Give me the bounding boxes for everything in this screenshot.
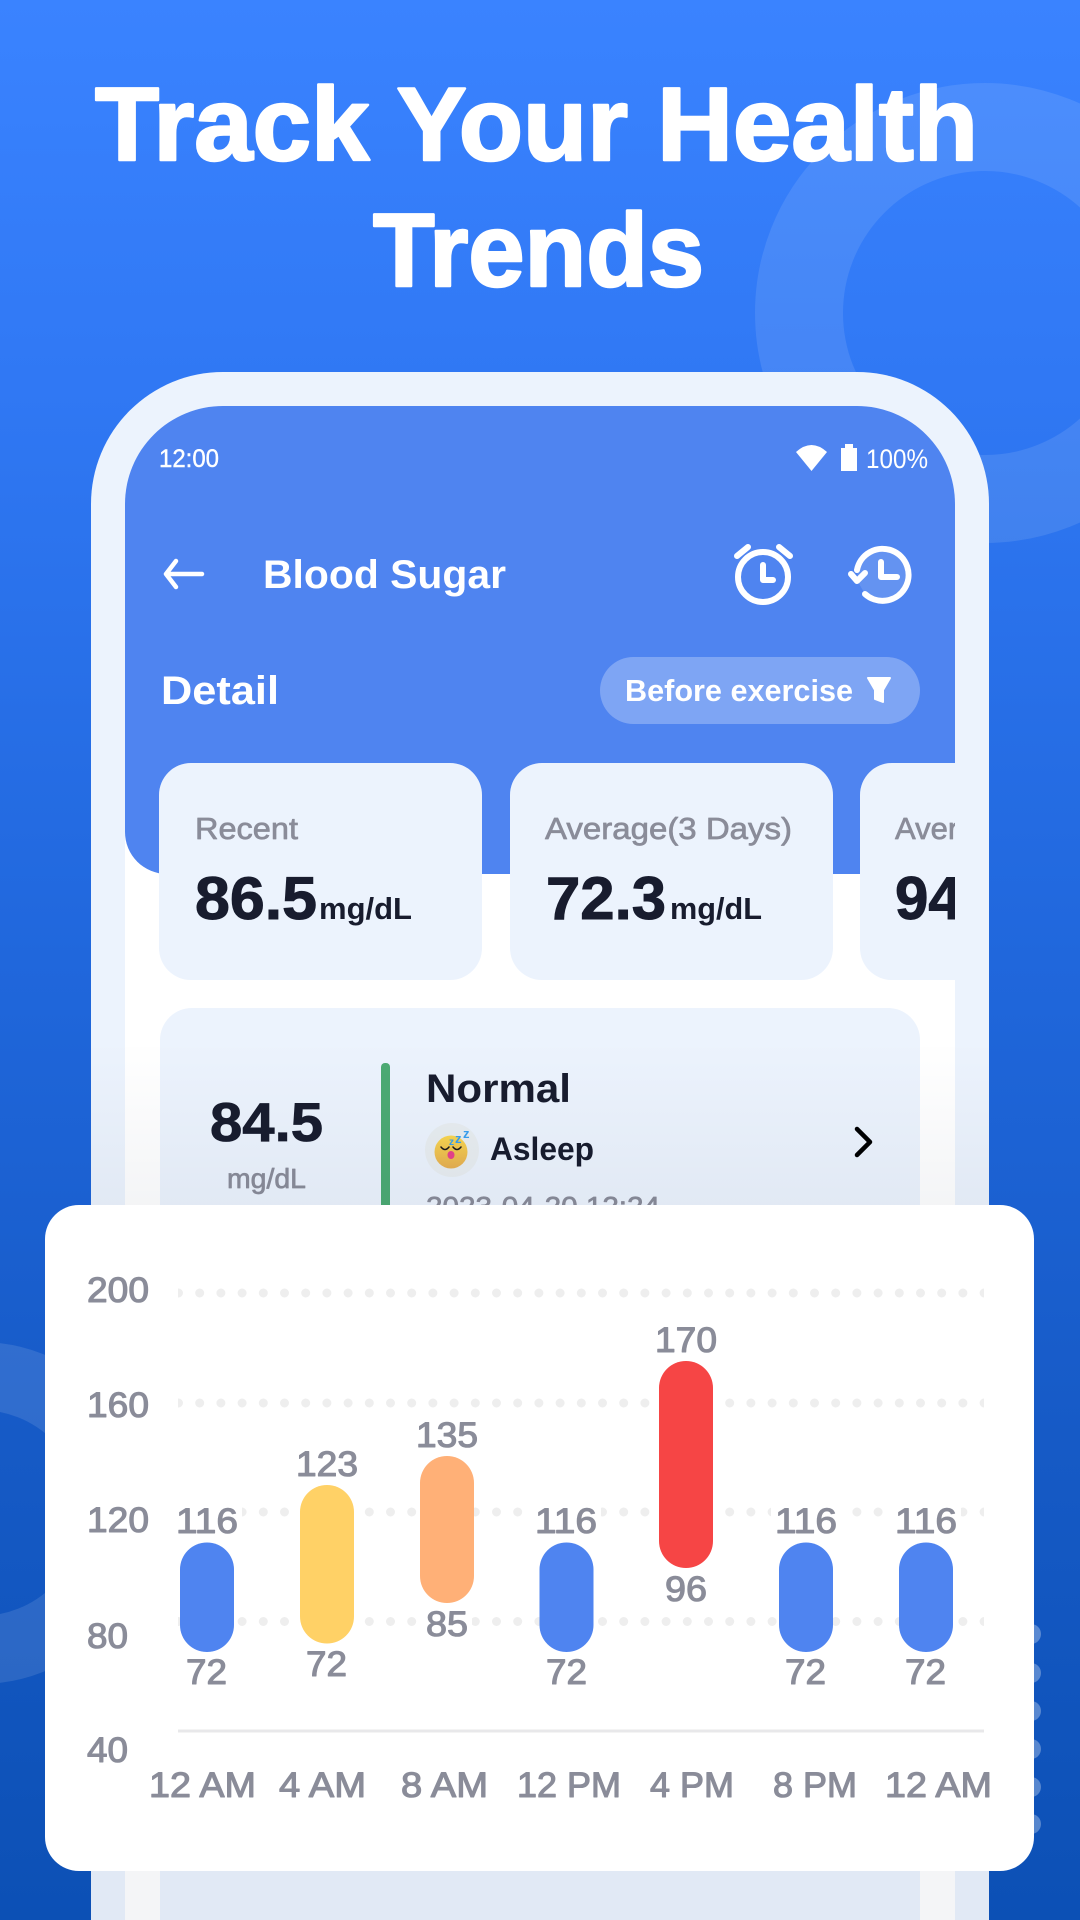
icon: funnel — [868, 678, 890, 702]
bar: 8 AM — [416, 1416, 478, 1644]
y axis labels: 40 — [87, 1731, 128, 1770]
card: average 3 days — [510, 763, 833, 980]
bar: 12 PM: 72 — [546, 1653, 587, 1692]
icon: sleeping emoji: z — [449, 1137, 454, 1148]
icon: sleeping emoji — [425, 1123, 479, 1177]
bar: 8 PM: 72 — [785, 1653, 826, 1692]
record date: 2023-04-20 12:24 — [426, 1191, 660, 1222]
y axis labels — [87, 1271, 149, 1770]
card: recent — [159, 763, 482, 980]
record card — [160, 1008, 920, 1920]
icon: sleeping emoji: z — [463, 1126, 470, 1141]
header panel — [125, 406, 955, 874]
card: average 3 days: 72.3 — [546, 865, 666, 932]
chart baseline — [178, 1730, 984, 1732]
record status: Normal — [426, 1067, 571, 1111]
phone mockup — [91, 372, 1080, 1920]
x axis labels — [149, 1766, 992, 1805]
x axis labels: 12 AM — [149, 1766, 256, 1805]
grid lines — [178, 1293, 990, 1622]
card: average 3 days: mg/dL — [670, 891, 762, 926]
decorative dots: right column — [1021, 1624, 1041, 1834]
phone screen — [125, 406, 955, 1920]
icon: back arrow — [166, 561, 202, 587]
y axis labels: 160 — [87, 1386, 149, 1425]
bar: 12 AM end: 72 — [905, 1653, 946, 1692]
card: average clipped: 94 — [895, 865, 962, 932]
bar: 12 AM: 72 — [186, 1653, 227, 1692]
record mood: Asleep — [490, 1131, 594, 1167]
status bar time: 12:00 — [159, 445, 219, 473]
y axis labels: 200 — [87, 1271, 149, 1310]
decorative ring: left — [0, 1376, 117, 1650]
decorative ring: top right — [799, 127, 1080, 499]
x axis labels: 4 PM — [650, 1766, 734, 1805]
bar: 4 AM: 123 — [296, 1445, 358, 1484]
title: Trends — [373, 193, 704, 309]
title — [95, 67, 978, 309]
icon: battery — [841, 444, 857, 471]
phone frame — [91, 372, 989, 1920]
card: average 3 days: Average(3 Days) — [545, 811, 792, 846]
card: recent: Recent — [195, 811, 298, 846]
y axis labels: 80 — [87, 1617, 128, 1656]
icon: alarm clock — [737, 547, 790, 602]
bar: 12 PM — [535, 1502, 597, 1692]
title: Track Your Health — [95, 67, 978, 183]
card: average clipped — [860, 763, 955, 980]
icon: history clock — [851, 549, 909, 601]
bar: 8 AM: 135 — [416, 1416, 478, 1455]
bar: 12 AM — [176, 1502, 238, 1692]
x axis labels: 12 PM — [517, 1766, 621, 1805]
x axis labels: 4 AM — [279, 1766, 366, 1805]
y axis labels: 120 — [87, 1501, 149, 1540]
bar: 8 AM: 85 — [426, 1605, 468, 1644]
record value: 84.5 — [210, 1091, 323, 1153]
battery percent: 100% — [866, 444, 928, 474]
chart panel — [45, 1205, 1034, 1871]
record unit: mg/dL — [227, 1163, 306, 1194]
bar: 12 PM: 116 — [535, 1502, 597, 1541]
card: average clipped: Average — [895, 811, 1010, 846]
filter pill: Before exercise — [625, 673, 853, 708]
bar: 12 AM end — [895, 1502, 957, 1692]
phone lower fade — [91, 1040, 989, 1205]
section heading: Detail — [161, 669, 279, 713]
bar: 4 PM: 170 — [655, 1321, 717, 1360]
bar: 4 PM: 96 — [665, 1570, 707, 1609]
screen title: Blood Sugar — [263, 553, 506, 597]
icon: sleeping emoji: z — [455, 1131, 462, 1146]
icon: chevron — [857, 1129, 870, 1155]
icon: wifi — [796, 445, 827, 471]
screen background — [125, 836, 955, 1920]
bar: 4 PM — [655, 1321, 717, 1609]
bar: 8 PM — [775, 1502, 837, 1692]
bar: 4 AM: 72 — [306, 1645, 347, 1684]
x axis labels: 12 AM — [885, 1766, 992, 1805]
bar: 12 AM: 116 — [176, 1502, 238, 1541]
bar: 4 AM — [296, 1445, 358, 1684]
phone lower tint — [91, 1205, 989, 1920]
label backgrounds — [172, 1505, 961, 1638]
bar: 12 AM end: 116 — [895, 1502, 957, 1541]
card: recent: mg/dL — [319, 891, 412, 926]
x axis labels: 8 PM — [773, 1766, 857, 1805]
x axis labels: 8 AM — [401, 1766, 488, 1805]
card: recent: 86.5 — [195, 865, 317, 932]
filter pill — [600, 657, 920, 724]
bar: 8 PM: 116 — [775, 1502, 837, 1541]
status bar: green — [381, 1063, 390, 1205]
panel background — [45, 1205, 1034, 1871]
